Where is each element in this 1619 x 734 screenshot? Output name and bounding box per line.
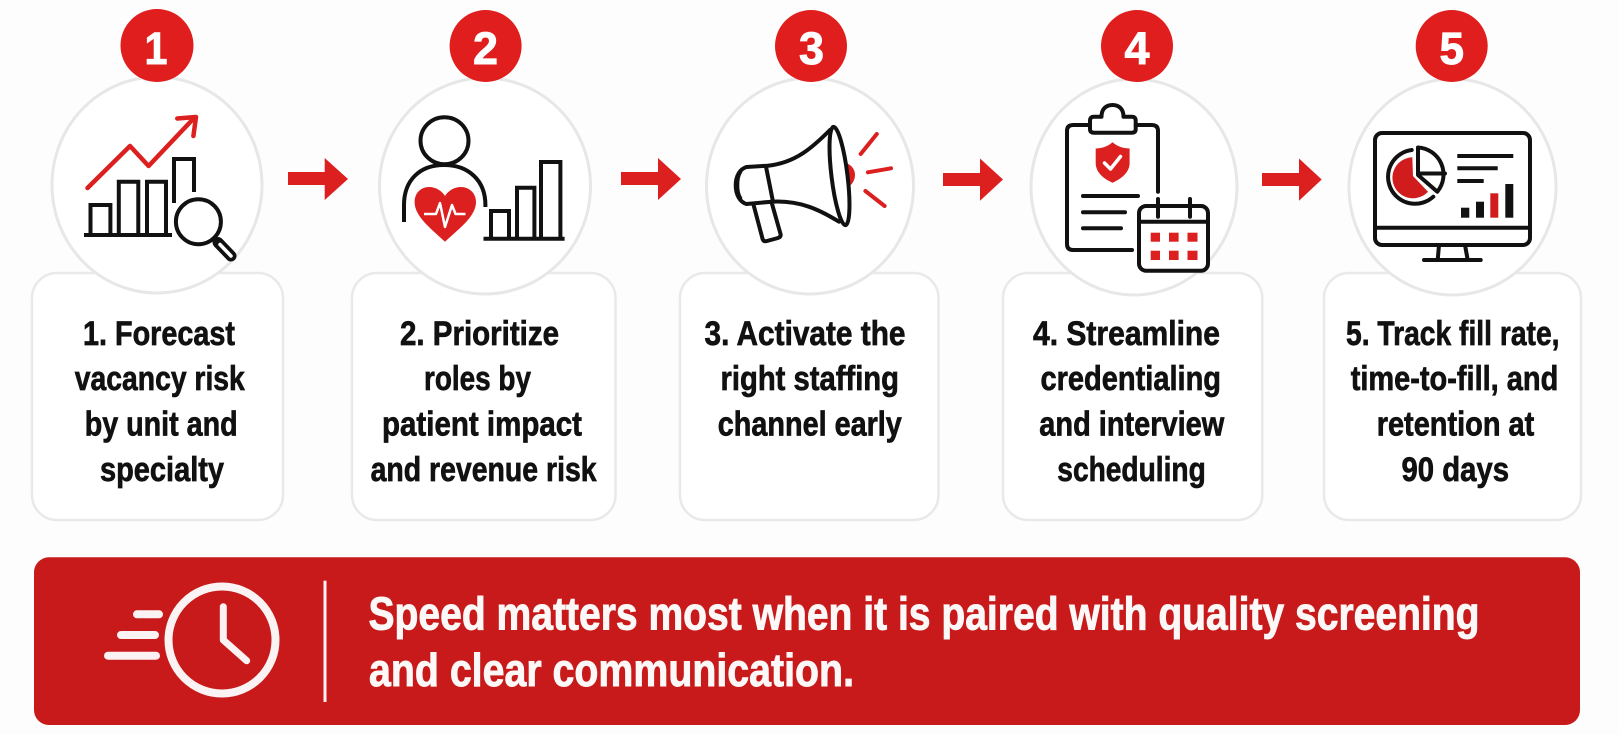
badge: number 1: 1 (144, 23, 168, 74)
panel: step 3 (680, 10, 938, 520)
card: step 2 (352, 273, 616, 520)
card: step 1 (32, 273, 283, 520)
panel: step 5 (1324, 10, 1581, 520)
badge: number 4 (1101, 10, 1173, 82)
text: step 3 label: right staffing (720, 360, 899, 398)
panel: step 2 (352, 10, 616, 520)
badge: number 2: 2 (473, 23, 498, 74)
arrow: step 4 to 5 (1262, 158, 1322, 201)
text: step 2 label: and revenue risk (371, 451, 597, 489)
circle: step 1 (52, 77, 262, 293)
arrow: step 2 to 3 (621, 158, 681, 200)
text: step 4 label (1033, 315, 1224, 489)
badge: number 1 (120, 9, 194, 82)
text: banner message: and clear communication. (369, 644, 854, 696)
icon: dashboard monitor (1375, 133, 1530, 260)
text: step 1 label: 1. Forecast (83, 315, 235, 353)
callout: speed banner (34, 557, 1580, 725)
circle: step 3 (706, 78, 914, 294)
banner background (34, 557, 1580, 725)
badge: number 5 (1416, 10, 1488, 82)
text: step 4 label: 4. Streamline (1033, 315, 1220, 353)
icon: clock with speed lines (108, 586, 276, 694)
text: step 4 label: credentialing (1040, 360, 1221, 398)
icon: patient with heart and bars (404, 117, 565, 242)
text: step 1 label: by unit and (85, 406, 238, 444)
text: step 5 label: 5. Track fill rate, (1346, 315, 1560, 353)
text: step 2 label: patient impact (382, 406, 582, 444)
text: banner message (368, 587, 1480, 696)
divider line (324, 581, 326, 702)
text: step 3 label: 3. Activate the (704, 315, 906, 353)
icon: megaphone (736, 126, 891, 241)
card: step 3 (680, 273, 938, 520)
text: step 3 label (704, 315, 906, 444)
badge: number 5: 5 (1440, 23, 1464, 74)
text: step 1 label (75, 315, 245, 489)
text: step 5 label: 90 days (1402, 451, 1509, 489)
card: step 5 (1324, 273, 1581, 520)
text: step 4 label: and interview (1039, 406, 1224, 444)
badge: number 4: 4 (1124, 23, 1150, 74)
text: step 5 label (1346, 315, 1560, 489)
circle: step 2 (380, 78, 590, 294)
icon: clipboard with shield and calendar (1067, 105, 1208, 271)
text: step 3 label: channel early (718, 406, 902, 444)
circle: step 4 (1031, 79, 1237, 295)
arrow: step 1 to 2 (288, 158, 348, 200)
text: step 1 label: vacancy risk (75, 360, 245, 398)
text: step 5 label: retention at (1377, 406, 1535, 444)
panel: step 4 (1003, 10, 1262, 520)
text: step 4 label: scheduling (1057, 451, 1206, 489)
text: step 1 label: specialty (100, 451, 224, 489)
icon: forecast chart with magnifier (84, 117, 231, 256)
circle: step 5 (1349, 79, 1556, 295)
text: step 2 label: roles by (424, 360, 531, 398)
badge: number 3 (775, 10, 847, 82)
text: step 2 label (371, 315, 597, 489)
panel: step 1 (32, 9, 283, 520)
badge: number 2 (450, 10, 522, 82)
text: step 5 label: time-to-fill, and (1351, 360, 1558, 398)
text: step 2 label: 2. Prioritize (400, 315, 559, 353)
card: step 4 (1003, 273, 1262, 520)
badge: number 3: 3 (799, 23, 824, 74)
arrow: step 3 to 4 (943, 158, 1003, 201)
